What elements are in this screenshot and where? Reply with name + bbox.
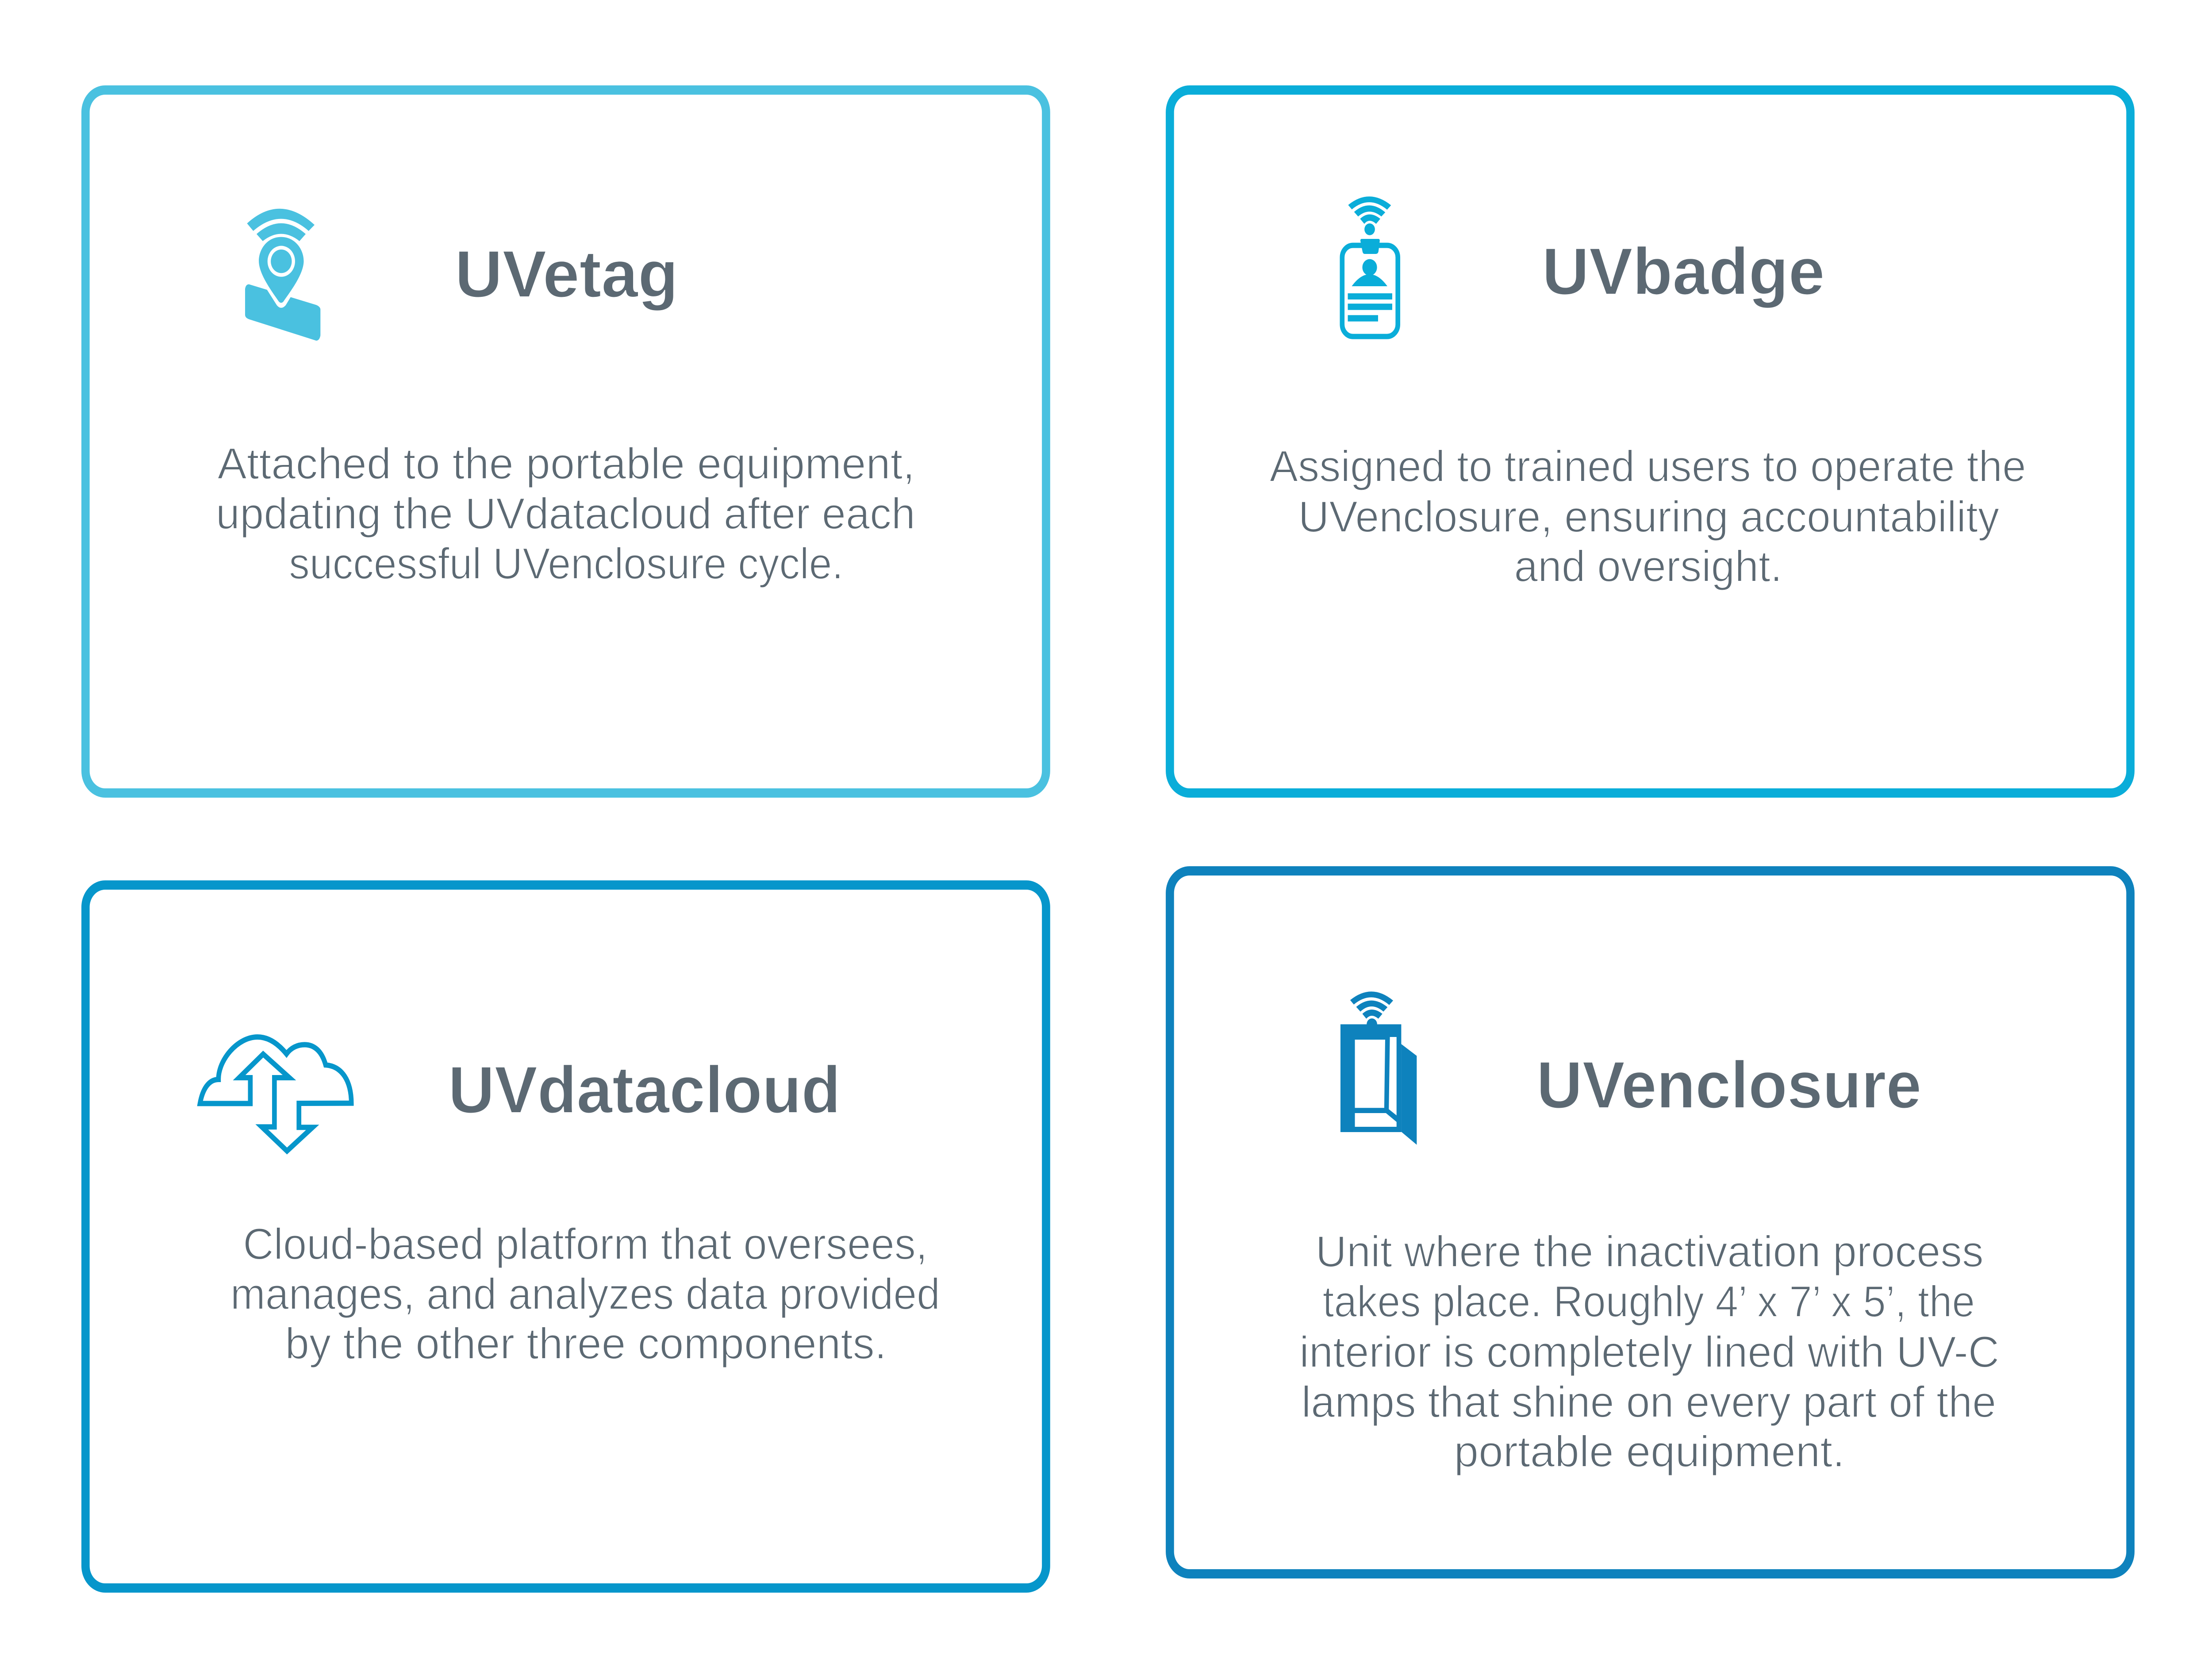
description: UVetag: updating the UVdatacloud after each bbox=[216, 489, 915, 538]
description: UVdatacloud: manages, and analyzes data provided bbox=[230, 1269, 940, 1318]
description: UVbadge: Assigned to trained users to operate the bbox=[1270, 442, 2026, 491]
panel: UVetag bbox=[85, 90, 1046, 793]
description: UVdatacloud: by the other three components. bbox=[285, 1319, 887, 1368]
icon: location pin with wifi on tag bbox=[245, 209, 320, 341]
description: UVbadge: and oversight. bbox=[1514, 541, 1782, 591]
description: UVbadge: UVenclosure, ensuring accountability bbox=[1298, 492, 1999, 541]
card border: UVdatacloud bbox=[85, 885, 1046, 1588]
description: UVenclosure: Unit where the inactivation process bbox=[1316, 1227, 1984, 1276]
description: UVetag: successful UVenclosure cycle. bbox=[289, 539, 843, 588]
description: UVenclosure bbox=[1299, 1227, 1999, 1476]
heading: UVbadge: UVbadge bbox=[1542, 235, 1825, 309]
heading: UVdatacloud: UVdatacloud bbox=[448, 1053, 841, 1127]
card border: UVetag bbox=[85, 90, 1046, 793]
description: UVbadge bbox=[1270, 442, 2026, 591]
description: UVetag bbox=[216, 439, 915, 588]
description: UVetag: Attached to the portable equipment, bbox=[217, 439, 915, 488]
icon: cloud with up and down arrows bbox=[200, 1037, 351, 1151]
heading: UVenclosure: UVenclosure bbox=[1536, 1048, 1921, 1122]
heading: UVetag: UVetag bbox=[455, 238, 678, 311]
description: UVenclosure: interior is completely lined with UV-C bbox=[1299, 1327, 1999, 1376]
icon: ID badge with wifi bbox=[1342, 196, 1398, 337]
card border: UVenclosure bbox=[1170, 871, 2131, 1574]
description: UVenclosure: takes place. Roughly 4’ x 7’ x 5’, the bbox=[1323, 1277, 1975, 1326]
card border: UVbadge bbox=[1170, 90, 2131, 793]
description: UVdatacloud bbox=[230, 1219, 940, 1368]
panel: UVenclosure bbox=[1170, 871, 2131, 1574]
icon: enclosure cabinet with open door and wifi bbox=[1340, 991, 1417, 1145]
panel: UVdatacloud bbox=[85, 885, 1046, 1588]
panel: UVbadge bbox=[1170, 90, 2131, 793]
description: UVdatacloud: Cloud-based platform that oversees, bbox=[243, 1219, 928, 1268]
description: UVenclosure: portable equipment. bbox=[1454, 1427, 1845, 1476]
description: UVenclosure: lamps that shine on every part of the bbox=[1302, 1377, 1996, 1426]
